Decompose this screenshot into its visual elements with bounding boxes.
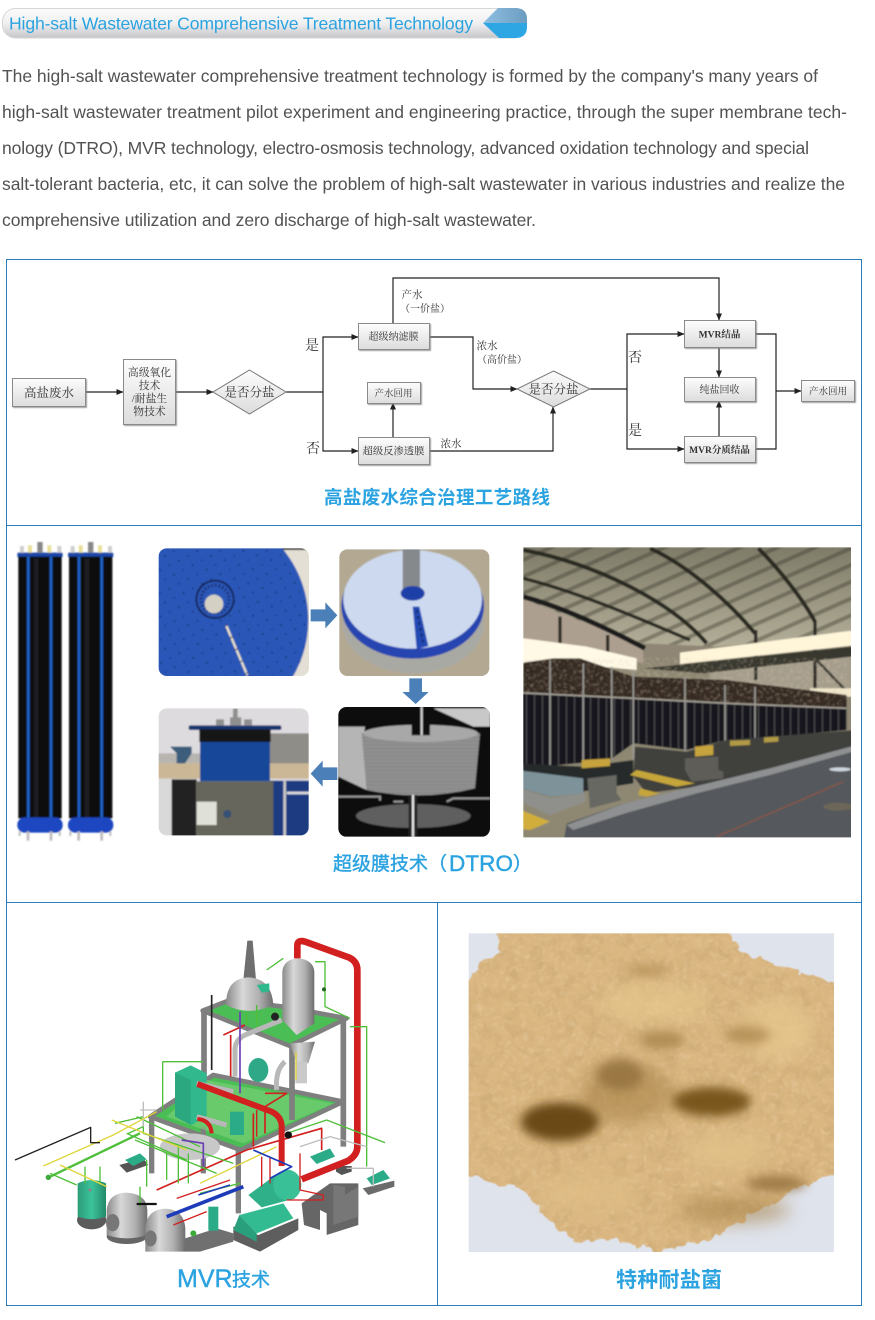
- DTRO caption: ）: [513, 853, 532, 875]
- panel: MVR technology: [15, 941, 394, 1293]
- box: pure salt recovery: 纯盐回收: [700, 383, 740, 396]
- decision: split salt 2: [517, 371, 590, 407]
- box: reverse osmosis: 超级反渗透膜: [363, 444, 424, 458]
- box: nanofiltration: [358, 324, 430, 350]
- box: advanced oxidation: 高级氧化: [128, 365, 171, 379]
- DTRO caption: [333, 851, 532, 876]
- DTRO caption: 超级膜技术: [333, 853, 428, 875]
- box: advanced oxidation: 物技术: [133, 404, 166, 418]
- branch and flow labels: （一价盐）: [400, 302, 450, 315]
- panel: salt-tolerant bacteria: [460, 923, 843, 1292]
- MVR caption: [177, 1265, 270, 1293]
- branch and flow labels: 浓水: [476, 339, 498, 352]
- box: product water reuse: [368, 382, 420, 404]
- MVR plant drawing: [15, 941, 394, 1252]
- box: MVR fractional crystallization: MVR分质结晶: [689, 444, 750, 456]
- blue pipes: [167, 1150, 292, 1217]
- box: advanced oxidation: [124, 360, 176, 424]
- branch and flow labels: 产水: [402, 288, 423, 301]
- intro paragraph: The high-salt wastewater comprehensive treatment technology is formed by the company's many years of: [2, 66, 818, 86]
- panel: DTRO technology: [16, 541, 851, 872]
- panel: process flowchart: [12, 278, 854, 508]
- MVR caption: 技术: [232, 1269, 270, 1291]
- flowchart caption: 高盐废水综合治理工艺路线: [324, 487, 550, 508]
- box: nanofiltration: 超级纳滤膜: [368, 330, 418, 343]
- upper platform: [203, 995, 347, 1147]
- branch and flow labels: 否: [306, 441, 320, 457]
- grey process pipes: [197, 1020, 285, 1125]
- photo: stacked membrane discs: [338, 707, 490, 837]
- intro paragraph: high-salt wastewater treatment pilot experiment and engineering practice, through the super membrane tech-: [2, 102, 847, 122]
- box: MVR crystallization: [684, 320, 756, 348]
- arrow: left: [311, 761, 337, 787]
- DTRO images group: [16, 541, 490, 842]
- foundations: [119, 1158, 394, 1252]
- connector lines: [85, 278, 801, 451]
- branch and flow labels: 是: [628, 423, 642, 439]
- banner tag: upper half: [483, 8, 527, 23]
- decision: split salt 1: 是否分盐: [224, 384, 275, 400]
- photo: bacteria powder: [460, 923, 843, 1257]
- green service pipes: [47, 958, 385, 1207]
- red main pipes: [157, 941, 357, 1225]
- intro paragraph: salt-tolerant bacteria, etc, it can solve the problem of high-salt wastewater in various industries and realize the: [2, 174, 845, 194]
- powder mass: [460, 923, 843, 1257]
- tanks and vessels: [77, 941, 390, 1252]
- photo: assembled DTRO module: [158, 708, 309, 836]
- black and purple lines: [15, 1012, 278, 1204]
- branch and flow labels: 浓水: [440, 437, 462, 450]
- banner tag: lower half: [483, 23, 527, 38]
- DTRO caption: （: [428, 853, 447, 875]
- pumps and valves: [46, 987, 326, 1236]
- yellow service pipes: [43, 1052, 296, 1187]
- box: MVR fractional crystallization: [684, 436, 756, 462]
- photo: membrane cushion on disc: [339, 549, 490, 676]
- header banner: [2, 8, 527, 38]
- powder highlights: [540, 983, 813, 1223]
- box: MVR crystallization: MVR结晶: [699, 328, 741, 340]
- banner title: High-salt Wastewater Comprehensive Treatment Technology: [9, 14, 473, 34]
- box: product water reuse: 产水回用: [374, 388, 413, 400]
- decision: split salt 1: [213, 370, 286, 414]
- branch and flow labels: 是: [305, 338, 319, 354]
- box: reverse osmosis: [358, 438, 430, 464]
- box: advanced oxidation: /耐盐生: [132, 391, 167, 405]
- intro paragraph: [2, 66, 847, 230]
- photo: membrane disc plate: [158, 548, 309, 676]
- DTRO column modules: [17, 542, 113, 841]
- DTRO caption: DTRO: [449, 851, 513, 876]
- lower platform: [150, 1075, 343, 1213]
- box: advanced oxidation: 技术: [139, 378, 160, 392]
- box: product water reuse output: [802, 380, 854, 402]
- intro paragraph: nology (DTRO), MVR technology, electro-osmosis technology, advanced oxidation technology and special: [2, 138, 809, 158]
- branch and flow labels: 否: [628, 350, 642, 366]
- table frame: [6, 260, 862, 1306]
- powder hollows: [521, 964, 807, 1191]
- box: pure salt recovery: [684, 378, 756, 402]
- branch and flow labels: [305, 288, 642, 457]
- arrow: down: [402, 678, 429, 704]
- intro paragraph: comprehensive utilization and zero discharge of high-salt wastewater.: [2, 210, 536, 230]
- box: high-salt wastewater: [12, 378, 86, 406]
- box: product water reuse output: 产水回用: [809, 386, 847, 398]
- decision: split salt 2: 是否分盐: [528, 382, 579, 396]
- photo: DTRO plant hall: [517, 540, 857, 843]
- arrow: right: [311, 602, 337, 628]
- branch and flow labels: （高价盐）: [477, 353, 527, 366]
- bacteria caption: 特种耐盐菌: [616, 1269, 722, 1292]
- MVR caption: MVR: [177, 1265, 233, 1293]
- box: high-salt wastewater: 高盐废水: [24, 385, 74, 400]
